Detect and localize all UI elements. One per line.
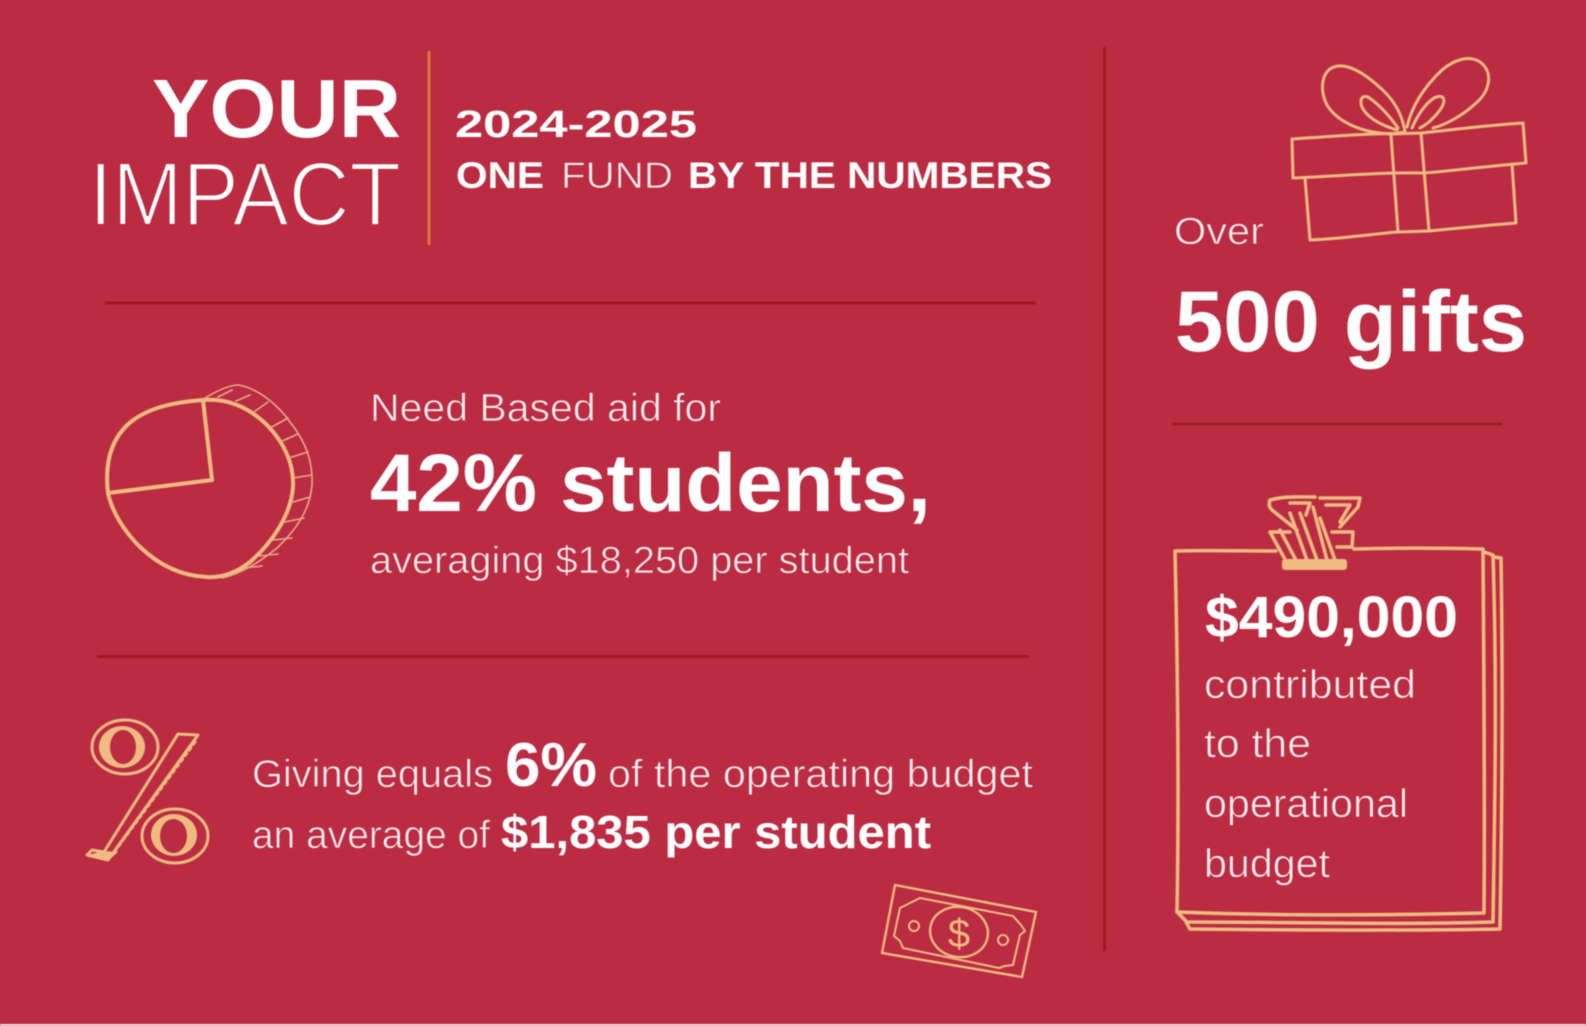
stat: need based aid: Need Based aid for [370,387,721,430]
stat: $490,000 contributed: budget [1204,842,1330,886]
stat: giving share of budget: Giving equals [252,753,493,796]
stat: over 500 gifts [1174,211,1527,370]
title: Your Impact: YOUR [152,62,401,155]
icon: dollar bill: $ [948,912,970,956]
stat: giving share of budget: of the operating budget [608,753,1033,796]
stat: giving share of budget [252,731,1033,858]
stat: $490,000 contributed: operational [1204,782,1408,826]
icon: pie chart [107,385,312,578]
subtitle: 2024-2025 One Fund by the numbers: FUND [561,155,673,196]
stat: need based aid: 42% students, [370,438,931,529]
stat: giving share of budget: 6% [505,731,597,800]
stat: $490,000 contributed: to the [1204,722,1311,766]
stat: need based aid: averaging $18,250 per student [370,540,909,582]
icon: gift box [1292,59,1526,240]
stat: over 500 gifts: 500 gifts [1175,274,1527,370]
title: Your Impact: IMPACT [89,145,401,245]
stat: $490,000 contributed: $490,000 [1205,585,1458,650]
subtitle: 2024-2025 One Fund by the numbers: ONE [456,155,544,196]
icon: percent sign [87,720,208,863]
subtitle: 2024-2025 One Fund by the numbers: BY THE NUMBERS [688,155,1052,196]
title: Your Impact [89,62,401,245]
subtitle: 2024-2025 One Fund by the numbers: 2024-2025 [455,104,697,146]
stat: giving share of budget: $1,835 per student [501,806,931,858]
icon: dollar bill [882,885,1036,977]
stat: need based aid [370,387,931,582]
stat: over 500 gifts: Over [1174,211,1264,253]
title divider [428,51,430,245]
stat: $490,000 contributed: contributed [1204,663,1416,707]
stat: $490,000 contributed [1204,585,1458,886]
subtitle: 2024-2025 One Fund by the numbers [455,104,1052,196]
stat: giving share of budget: an average of [252,814,490,857]
icon: clipped note stack [1175,497,1502,930]
